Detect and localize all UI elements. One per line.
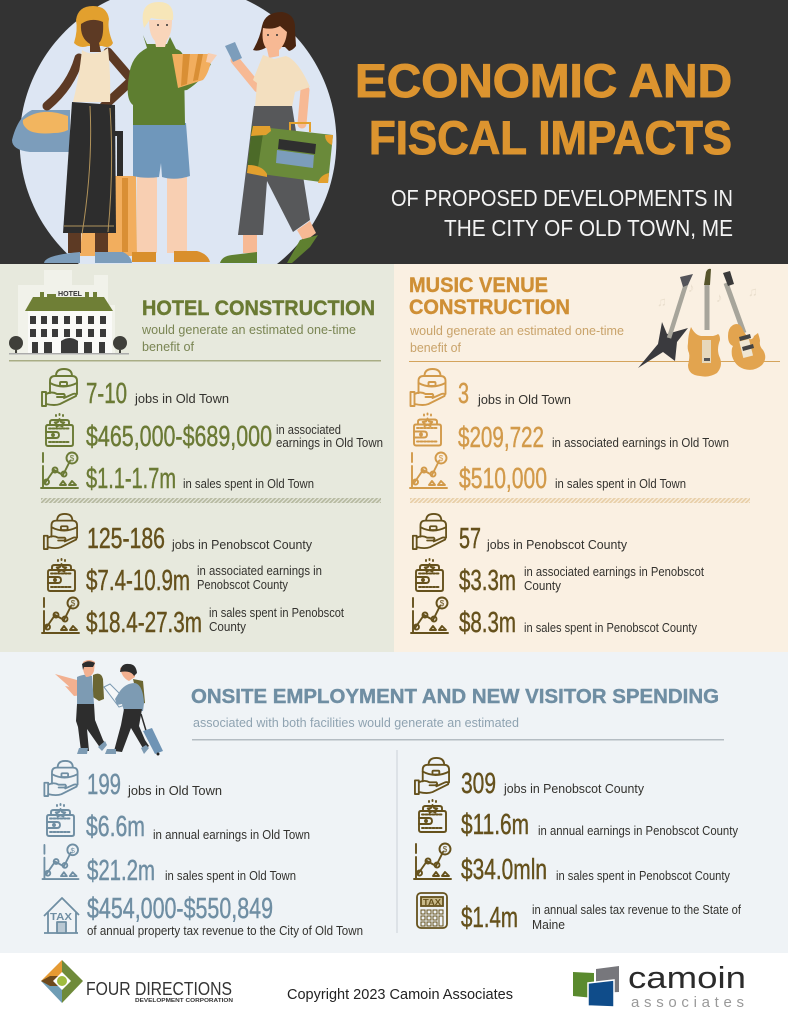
stats: music Penobscot County: County [524,579,562,593]
logo: Four Directions [41,960,233,1004]
stats: music Penobscot County: $3.3m [459,565,516,597]
panel: hotel construction [0,264,394,652]
intro text [409,324,624,355]
panel: header [0,0,788,264]
logo: Four Directions: FOUR DIRECTIONS [86,979,232,999]
stats: music Old Town: $510,000 [459,463,547,495]
stats: hotel Old Town: jobs in Old Town [134,392,229,406]
illustration: guitars: ♪ [716,290,722,305]
subtitle: OF PROPOSED DEVELOPMENTS IN [391,185,733,211]
stats: Penobscot County onsite [461,768,741,934]
stats: Old Town onsite: in annual earnings in Old Town [153,828,310,842]
stats: Old Town onsite: 199 [87,769,121,801]
stats: music Old Town: 3 [458,378,469,410]
stats: music Penobscot County: in associated earnings in Penobscot [524,565,704,579]
subtitle [391,185,733,241]
icon: calculator [417,893,447,928]
stats: music Penobscot County: in sales spent in Penobscot County [524,621,698,635]
stats: Old Town onsite [86,769,363,938]
stats: Penobscot County onsite: $1.4m [461,902,518,934]
stats: hotel Old Town: in sales spent in Old Town [183,477,314,491]
stats: hotel Penobscot County: $7.4-10.9m [86,565,190,597]
stats: Penobscot County onsite: jobs in Penobscot County [503,782,645,796]
icons: music Old Town [410,369,447,488]
stats: music Old Town: $209,722 [458,422,544,454]
stats: hotel Penobscot County: in associated earnings in [197,564,322,578]
heading: CONSTRUCTION [409,296,570,319]
icon: tax house [44,898,79,933]
illustration: hotel building: HOTEL [58,291,83,298]
illustration: guitars [638,269,765,377]
stats: music Penobscot County [459,523,704,639]
heading: HOTEL CONSTRUCTION [142,297,375,320]
heading: ONSITE EMPLOYMENT AND NEW VISITOR SPENDING [191,686,719,708]
person 3 [220,12,333,263]
illustration: hotel building [9,270,129,355]
stats: Penobscot County onsite: $34.0mln [461,854,547,886]
panel: onsite employment and visitor spending [0,652,788,953]
stats: hotel Penobscot County [86,523,344,639]
stats: music Penobscot County: 57 [459,523,481,555]
stats: hotel Penobscot County: County [209,620,247,634]
illustration: two hikers [55,660,163,756]
person 2 [128,2,217,262]
logo: Camoin Associates [573,960,746,1011]
stats: Penobscot County onsite: Maine [532,918,565,932]
icons: Old Town onsite [42,761,79,933]
logo: Camoin Associates: camoin [628,960,746,995]
intro text: benefit of [142,340,195,354]
suitcase orange [80,131,137,256]
logo: Four Directions: DEVELOPMENT CORPORATION [135,998,233,1004]
intro text [141,323,356,354]
stats: Old Town onsite: in sales spent in Old Town [165,869,296,883]
stats: hotel Penobscot County: jobs in Penobscot County [171,538,313,552]
illustration: guitars: ♫ [657,294,667,309]
stats: Old Town onsite: of annual property tax revenue to the City of Old Town [87,924,363,938]
stats: Old Town onsite: $454,000-$550,849 [87,893,273,925]
title: FISCAL IMPACTS [369,111,732,164]
title: ECONOMIC AND [355,54,732,107]
icon: tax house: TAX [50,912,72,923]
stats: hotel Penobscot County: in sales spent in Penobscot [209,606,344,620]
stats: hotel Penobscot County: 125-186 [87,523,165,555]
stats: music Penobscot County: $8.3m [459,607,516,639]
stats: hotel Old Town: $1.1-1.7m [86,463,176,495]
stats: hotel Penobscot County: Penobscot County [197,578,289,592]
subtitle: THE CITY OF OLD TOWN, ME [444,215,733,241]
illustration: guitars: ♪ [688,280,694,295]
illustration: three travellers [12,2,333,263]
person 1 [12,6,132,263]
stats: Penobscot County onsite: in annual sales tax revenue to the State of [532,903,741,917]
stats: music Old Town: jobs in Old Town [477,393,571,407]
stats: Old Town onsite: $21.2m [87,855,155,887]
heading [409,274,570,319]
stats: music Old Town [458,378,729,495]
icons: hotel Penobscot County [42,514,79,633]
stats: music Old Town: in associated earnings in Old Town [552,436,729,450]
stats: music Penobscot County: jobs in Penobscot County [486,538,628,552]
stats: Old Town onsite: jobs in Old Town [127,784,222,798]
panel: music venue construction [394,264,788,652]
title [355,54,732,164]
stats: hotel Old Town: in associated [276,423,341,437]
icons: hotel Old Town [41,369,78,488]
stats: Penobscot County onsite: $11.6m [461,809,529,841]
stats: hotel Old Town: earnings in Old Town [276,436,383,450]
intro text: benefit of [410,341,462,355]
intro text: would generate an estimated one-time [141,323,356,337]
copyright: Copyright 2023 Camoin Associates [287,986,513,1003]
intro text: associated with both facilities would generate an estimated [193,716,519,730]
stats: hotel Old Town: $465,000-$689,000 [86,421,272,453]
stats: hotel Penobscot County: $18.4-27.3m [86,607,202,639]
stats: music Old Town: in sales spent in Old Town [555,477,686,491]
stats: Old Town onsite: $6.6m [86,811,145,843]
stats: hotel Old Town: 7-10 [86,378,127,410]
stats: Penobscot County onsite: in annual earnings in Penobscot County [538,824,739,838]
stats: Penobscot County onsite: in sales spent in Penobscot County [556,869,731,883]
icon: calculator: TAX [423,898,442,907]
icons: music Penobscot County [411,514,448,633]
illustration: guitars: ♫ [748,284,758,299]
heading: MUSIC VENUE [409,274,548,297]
stats: Penobscot County onsite: 309 [461,768,496,800]
logo: Camoin Associates: associates [631,994,744,1011]
stats: hotel Old Town [86,378,383,495]
intro text: would generate an estimated one-time [409,324,624,338]
icons: Penobscot County onsite [414,758,451,928]
